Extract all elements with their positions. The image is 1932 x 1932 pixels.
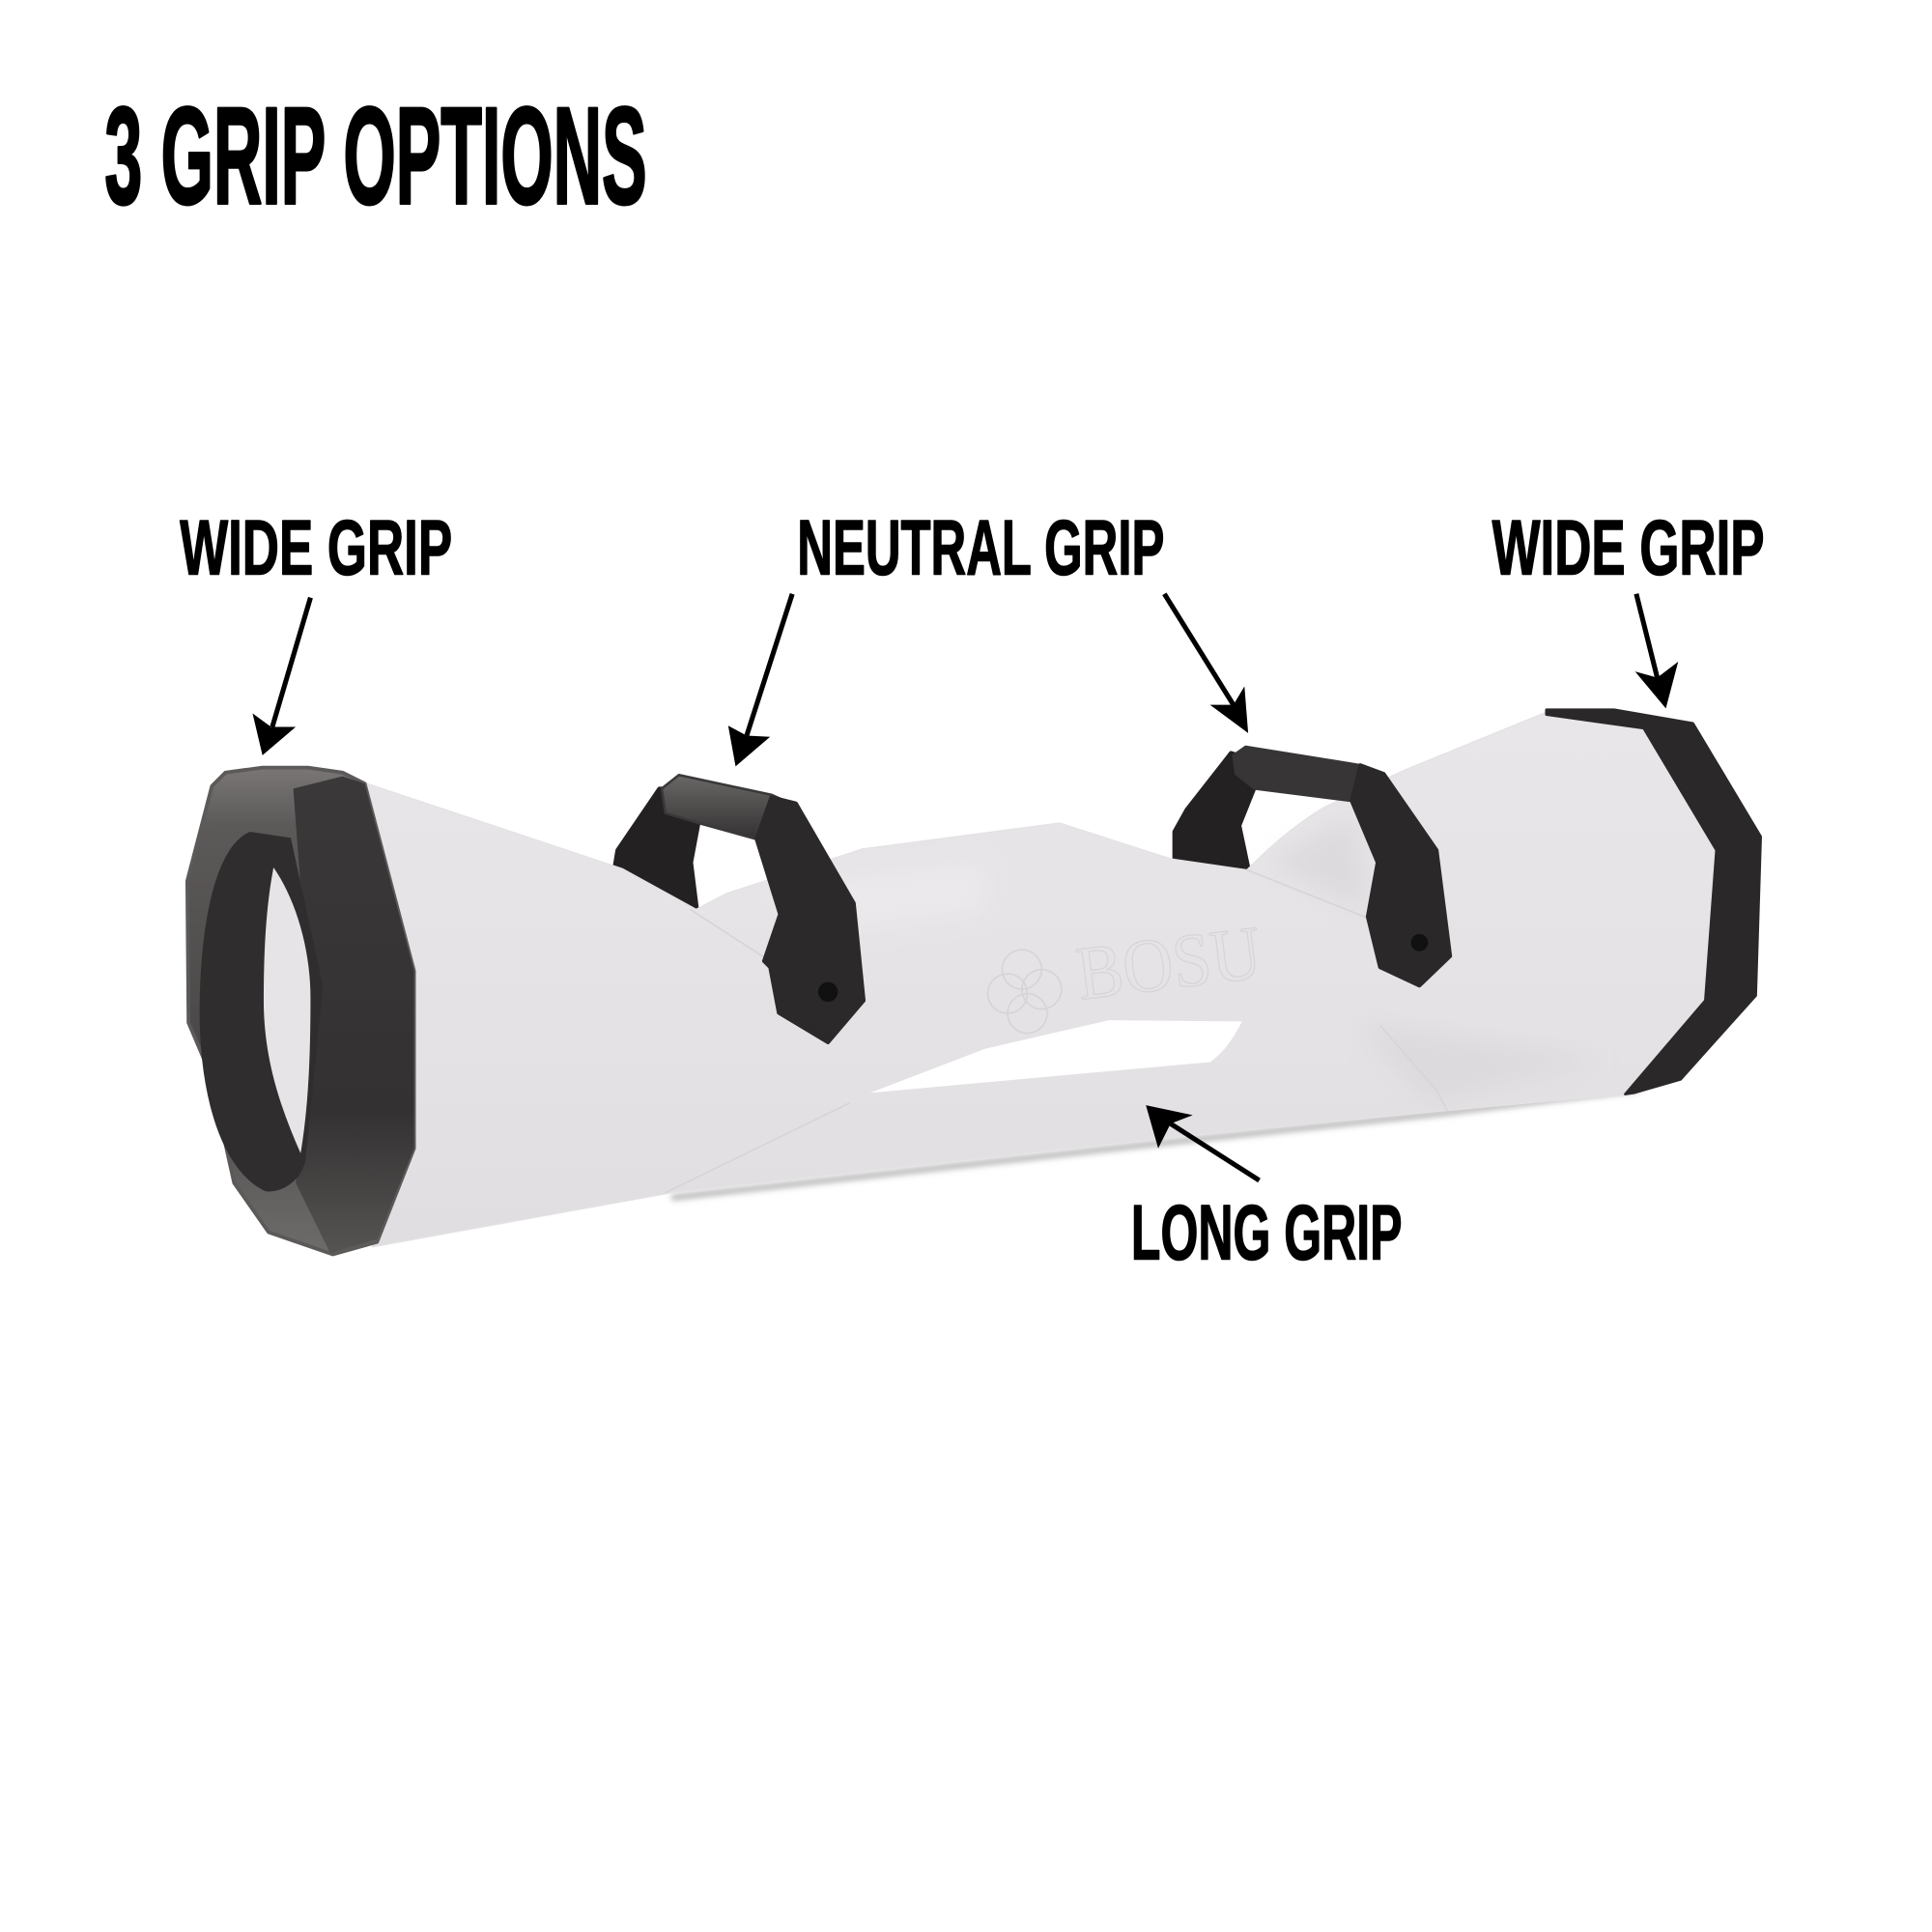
body soft shading <box>764 813 1602 1103</box>
gap between twist and long grip <box>870 1020 1242 1093</box>
handle screw <box>818 982 838 1002</box>
right handle <box>1234 747 1450 985</box>
arrow: wide grip right <box>1635 594 1678 708</box>
product illustration <box>187 710 1761 1254</box>
right handle back leg <box>1175 753 1254 872</box>
handle front arm <box>1351 765 1450 985</box>
arrow: neutral grip right <box>1164 594 1248 733</box>
ground shadow <box>671 1090 1638 1198</box>
cap inner ring <box>200 832 323 1191</box>
arrow: neutral grip left <box>728 594 792 766</box>
right end cap <box>1547 710 1761 1094</box>
infographic canvas: 3 GRIP OPTIONS <box>104 79 647 233</box>
label: wide grip right: WIDE GRIP <box>1492 504 1765 591</box>
arrow: wide grip left <box>252 598 310 755</box>
left handle back leg <box>613 788 698 914</box>
logo mark <box>982 946 1066 1037</box>
shade: twist behind right handle <box>1269 813 1368 912</box>
logo wordmark: BOSU <box>1072 911 1265 1017</box>
grip body <box>359 712 1717 1247</box>
shade: lower right bulb <box>1355 1023 1602 1103</box>
cap side band <box>294 777 414 1253</box>
left end cap <box>187 768 414 1254</box>
left handle <box>662 775 864 1042</box>
cap outer <box>187 768 414 1254</box>
bar seam lines <box>666 870 1448 1193</box>
cap opening <box>264 867 310 1153</box>
shade: center twist top <box>764 863 985 936</box>
handle bar <box>662 775 796 850</box>
label: long grip: LONG GRIP <box>1131 1190 1403 1277</box>
label: neutral grip: NEUTRAL GRIP <box>797 504 1164 591</box>
handle screw <box>1410 934 1428 952</box>
BOSU embossed logo <box>981 911 1267 1037</box>
arrow: long grip <box>1146 1105 1260 1180</box>
handle front arm <box>756 797 864 1042</box>
handle bar <box>1234 747 1383 807</box>
label: wide grip left: WIDE GRIP <box>180 504 452 591</box>
